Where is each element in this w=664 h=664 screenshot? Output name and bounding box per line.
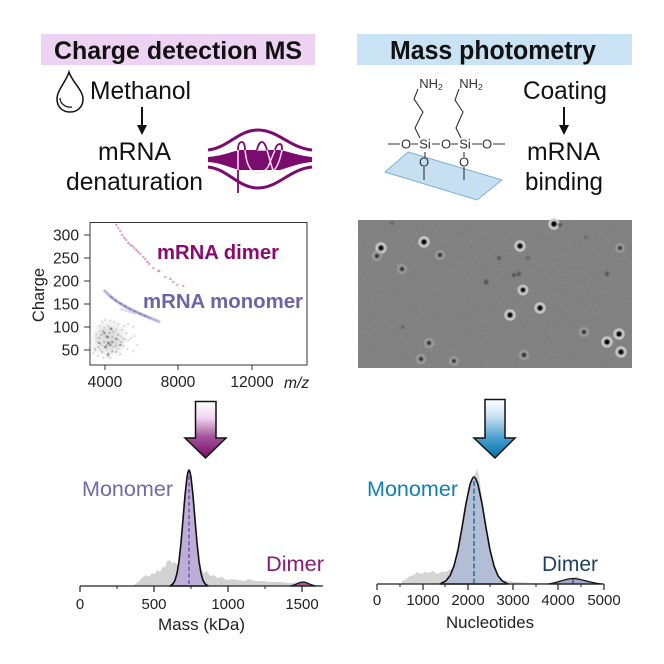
axis labels: 500 <box>141 596 167 613</box>
y axis ticks and labels: 200 <box>53 274 79 290</box>
chart: charge vs m/z scatter <box>30 222 309 392</box>
peak: monomer <box>440 477 508 584</box>
median line: monomer <box>188 476 190 586</box>
arrow: blue gradient down arrow <box>474 400 515 458</box>
molecule atoms: Si <box>459 136 471 152</box>
data: low-charge cluster <box>90 320 138 358</box>
chart: mass histogram <box>76 470 324 634</box>
peak: dimer <box>290 582 316 586</box>
text: mRNA binding <box>525 139 603 196</box>
icon: mRNA in ion trap <box>208 130 312 193</box>
y axis ticks and labels: 50 <box>62 342 79 360</box>
median line: dimer <box>572 579 574 584</box>
molecule atoms: Si <box>419 136 431 152</box>
y axis title: Charge <box>30 268 48 322</box>
text: Coating: Coating <box>523 78 607 105</box>
text: mRNA binding: binding <box>525 169 603 196</box>
label: Monomer: Monomer <box>367 477 458 501</box>
molecule atoms: O <box>441 136 451 152</box>
image: mass photometry ratiometric frame <box>358 220 632 368</box>
axis labels: 1500 <box>285 596 319 613</box>
x axis ticks and labels: m/z <box>284 375 309 392</box>
y axis ticks and labels: 100 <box>53 320 79 336</box>
median line: monomer <box>473 481 475 584</box>
molecule atoms: NH <box>419 76 438 91</box>
arrow: methanol to denaturation <box>137 107 147 135</box>
axis <box>377 584 604 590</box>
plot frame <box>90 222 307 365</box>
axis labels: 0 <box>76 596 84 613</box>
panel: mass photometry column <box>357 34 632 632</box>
axis labels: 1000 <box>211 596 245 613</box>
axis labels <box>373 592 621 609</box>
peak: dimer <box>548 578 602 584</box>
molecule atoms: O <box>419 154 429 170</box>
histogram: gray background distribution <box>402 468 604 584</box>
axis labels: 0 <box>373 592 381 609</box>
histogram: gray background distribution <box>133 560 323 586</box>
molecule atoms: 2 <box>438 82 443 92</box>
molecule atoms: O <box>459 154 469 170</box>
x axis ticks and labels: 4000 <box>88 374 123 391</box>
chart: nucleotides histogram <box>367 468 621 632</box>
particles: faint <box>390 221 609 329</box>
molecule atoms: NH <box>459 76 478 91</box>
particles: medium <box>373 244 624 365</box>
text: mRNA denaturation <box>66 139 203 196</box>
glass slide <box>385 152 502 200</box>
x axis ticks and labels: 8000 <box>161 374 196 391</box>
axis labels: 4000 <box>541 592 575 609</box>
label: Dimer: Dimer <box>542 553 598 576</box>
icon: aminosilane coated glass <box>385 76 505 200</box>
text: mRNA binding: mRNA <box>527 139 601 166</box>
axis labels: 1000 <box>406 592 440 609</box>
y axis ticks and labels: 150 <box>53 296 79 314</box>
molecule atoms <box>401 76 492 170</box>
molecule bonds <box>388 89 505 180</box>
axis labels: 5000 <box>587 592 621 609</box>
axis title: Mass (kDa) <box>158 615 245 634</box>
molecule atoms: O <box>401 136 411 152</box>
data: monomer series <box>104 290 160 322</box>
data: dimer series <box>116 225 184 286</box>
particles: strong <box>376 220 626 356</box>
arrow: purple gradient down arrow <box>185 402 226 458</box>
molecule atoms: O <box>482 136 492 152</box>
axis labels <box>76 596 319 613</box>
heading: Mass photometry: Mass photometry <box>390 37 597 65</box>
icon: methanol drop <box>57 72 83 112</box>
peak: monomer <box>170 470 208 586</box>
label: mRNA dimer: mRNA dimer <box>157 242 279 264</box>
axis <box>80 586 323 592</box>
y axis ticks and labels: 250 <box>53 250 79 268</box>
axis labels: 2000 <box>451 592 485 609</box>
label: mRNA monomer: mRNA monomer <box>143 291 303 313</box>
heading: Mass photometry <box>357 34 632 65</box>
x axis ticks and labels: 12000 <box>230 374 274 391</box>
label: Dimer: Dimer <box>266 551 324 576</box>
axis labels: 3000 <box>496 592 530 609</box>
y axis ticks and labels: 300 <box>53 228 79 244</box>
text: mRNA denaturation: denaturation <box>66 169 203 196</box>
heading: Charge detection MS: Charge detection MS <box>54 37 302 65</box>
text: Methanol: Methanol <box>90 78 191 105</box>
axis title: Nucleotides <box>446 613 534 632</box>
panel: charge detection MS column <box>30 34 324 634</box>
molecule atoms: 2 <box>478 82 483 92</box>
x axis ticks and labels <box>88 365 309 392</box>
text: mRNA denaturation: mRNA <box>98 139 172 166</box>
label: Monomer: Monomer <box>82 477 173 501</box>
arrow: coating to binding <box>559 107 569 135</box>
y axis ticks and labels <box>53 228 90 360</box>
